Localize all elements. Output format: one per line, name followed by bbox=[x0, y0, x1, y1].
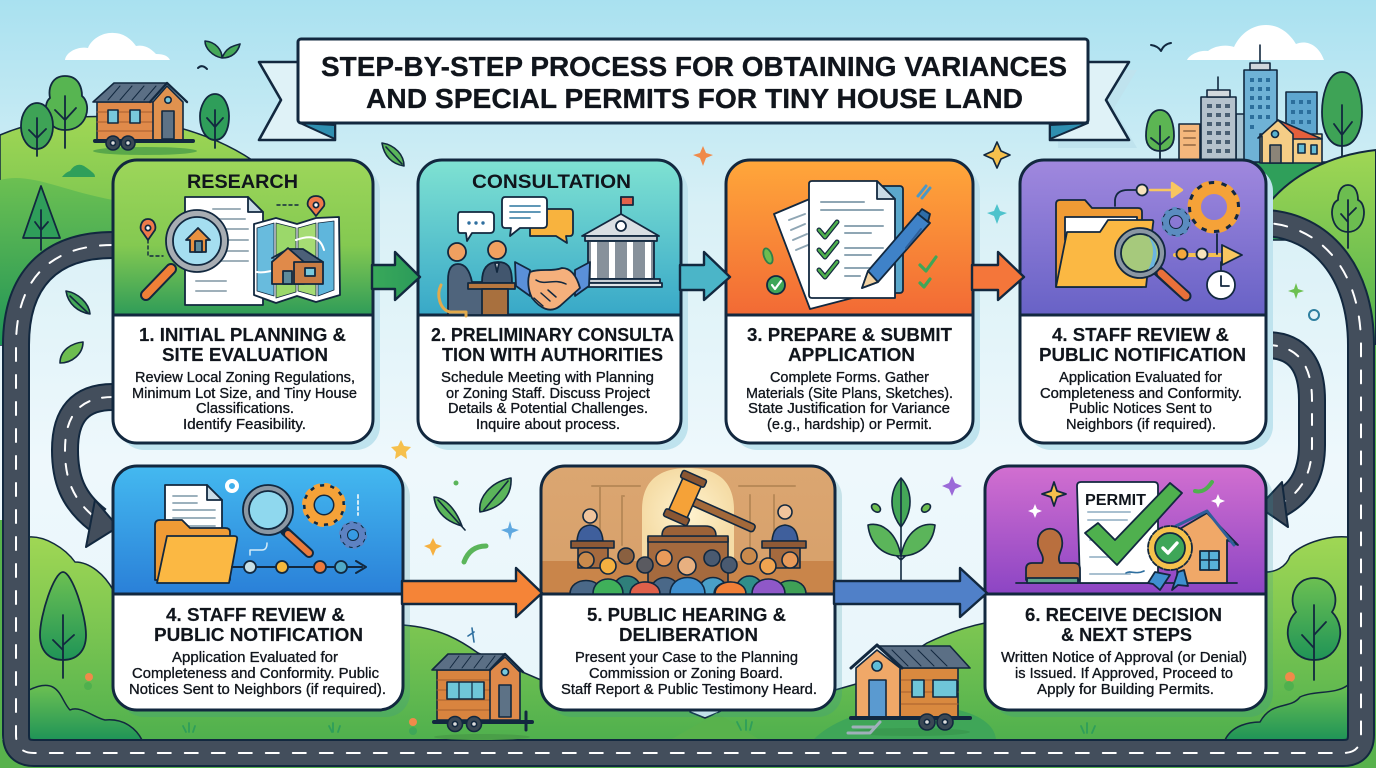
title banner: STEP-BY-STEP PROCESS FOR OBTAINING VARIANCES bbox=[321, 51, 1067, 82]
arrow: application to staff review bbox=[972, 252, 1024, 300]
icon: research document, map and magnifier bbox=[141, 196, 340, 305]
icon: permit, stamp, seal and house bbox=[1016, 482, 1238, 590]
flowers bbox=[84, 672, 1295, 735]
icon: permit, stamp, seal and house: PERMIT bbox=[1085, 492, 1147, 509]
panel: step 4 staff review: 4. STAFF REVIEW & bbox=[1052, 324, 1229, 345]
panel: step 4 staff review: Neighbors (if required). bbox=[1066, 417, 1216, 433]
panel: step 5 public hearing: 5. PUBLIC HEARING & bbox=[587, 604, 786, 625]
road arrow left bbox=[65, 397, 118, 547]
panel: step 4 staff review: Public Notices Sent to bbox=[1069, 401, 1212, 417]
panel: step 4 repeated staff review: PUBLIC NOTIFICATION bbox=[154, 624, 363, 645]
tree near city right bbox=[1322, 72, 1362, 156]
panel: step 6 receive decision: Written Notice of Approval (or Denial) bbox=[1001, 650, 1247, 666]
city skyline bbox=[1179, 45, 1322, 163]
grass tufts bbox=[183, 720, 1095, 733]
panel: step 1 research: Review Local Zoning Regulations, bbox=[135, 370, 355, 386]
panel: step 6 receive decision: 6. RECEIVE DECISION bbox=[1025, 604, 1222, 625]
panel: step 4 staff review: PUBLIC NOTIFICATION bbox=[1039, 344, 1246, 365]
panel: step 4 repeated staff review: Completeness and Conformity. Public bbox=[132, 666, 379, 682]
panel: step 2 consultation: Details & Potential Challenges. bbox=[448, 401, 648, 417]
panel: step 5 public hearing: Present your Case to the Planning bbox=[575, 650, 798, 666]
tree on right hill bbox=[1332, 185, 1364, 248]
bird left bbox=[198, 66, 207, 69]
panel: step 4 staff review: Completeness and Conformity. bbox=[1040, 386, 1242, 402]
decorative leaves and sparkles bbox=[60, 41, 1319, 642]
sprout plant bbox=[868, 478, 935, 580]
arrow: hearing to decision bbox=[834, 568, 987, 617]
icon: courtroom with gavel, speakers and audience bbox=[570, 468, 806, 594]
icon: folder, magnifier, gears and clock bbox=[1056, 183, 1242, 299]
panel: step 1 research: Minimum Lot Size, and Tiny House bbox=[132, 386, 357, 402]
panel: step 5 public hearing bbox=[541, 466, 842, 717]
panel: step 2 consultation: CONSULTATION bbox=[472, 171, 631, 193]
tree bottom left bbox=[40, 572, 86, 678]
panel: step 3 prepare and submit bbox=[726, 160, 980, 450]
road arrow right bbox=[1259, 345, 1312, 527]
panel: step 6 receive decision: & NEXT STEPS bbox=[1061, 624, 1192, 645]
cloud right bbox=[1187, 25, 1324, 60]
panel: step 5 public hearing: Commission or Zoning Board. bbox=[589, 666, 783, 682]
icon: meeting, handshake and government building bbox=[439, 197, 662, 316]
panel: step 3 prepare and submit: 3. PREPARE & SUBMIT bbox=[747, 324, 953, 345]
panel: step 1 research: Identify Feasibility. bbox=[183, 417, 306, 433]
panel: step 4 staff review bbox=[1020, 160, 1273, 450]
left top trees bbox=[21, 76, 229, 250]
panel: step 4 repeated staff review: 4. STAFF REVIEW & bbox=[166, 604, 345, 625]
icon: document, folder, magnifier and timeline bbox=[155, 481, 366, 583]
cloud left bbox=[65, 33, 170, 60]
title banner: AND SPECIAL PERMITS FOR TINY HOUSE LAND bbox=[366, 83, 1023, 114]
title banner bbox=[259, 39, 1137, 148]
tiny house bottom right bbox=[848, 645, 970, 736]
panel: step 2 consultation: TION WITH AUTHORITIES bbox=[442, 344, 663, 365]
panel: step 1 research: SITE EVALUATION bbox=[162, 344, 328, 365]
panel: step 1 research: RESEARCH bbox=[187, 171, 298, 193]
icon: application forms and pen bbox=[762, 181, 936, 309]
panel: step 3 prepare and submit: Complete Forms. Gather bbox=[770, 370, 929, 386]
panel: step 4 repeated staff review: Notices Sent to Neighbors (if required). bbox=[129, 682, 386, 698]
panel: step 3 prepare and submit: (e.g., hardship) or Permit. bbox=[767, 417, 932, 433]
bird right bbox=[1151, 43, 1171, 51]
arrow: staff review to hearing bbox=[402, 568, 542, 617]
winding road around the page bbox=[16, 223, 1361, 753]
arrow: research to consultation bbox=[372, 252, 420, 300]
panel: step 5 public hearing: DELIBERATION bbox=[619, 624, 758, 645]
tree bottom right bbox=[1288, 578, 1340, 680]
panel: step 4 repeated staff review bbox=[113, 466, 410, 717]
panel: step 3 prepare and submit: APPLICATION bbox=[788, 344, 915, 365]
panel: step 3 prepare and submit: State Justification for Variance bbox=[748, 401, 950, 417]
bottom green meadow bbox=[0, 345, 1376, 768]
tiny house top left bbox=[93, 83, 197, 155]
left top hill bbox=[0, 116, 252, 345]
panel: step 1 research: Classifications. bbox=[196, 401, 294, 417]
panel: step 4 staff review: Application Evaluated for bbox=[1059, 370, 1222, 386]
panel: step 1 research bbox=[113, 160, 380, 450]
right top hills bbox=[1240, 150, 1376, 345]
arrow: consultation to application bbox=[680, 252, 730, 300]
panel: step 2 consultation: or Zoning Staff. Discuss Project bbox=[446, 386, 650, 402]
panel: step 4 repeated staff review: Application Evaluated for bbox=[172, 650, 338, 666]
tree near city left bbox=[1146, 110, 1174, 160]
panel: step 6 receive decision bbox=[985, 466, 1273, 717]
panel: step 6 receive decision: Apply for Building Permits. bbox=[1037, 682, 1214, 698]
panel: step 2 consultation: 2. PRELIMINARY CONSULTA bbox=[431, 324, 674, 345]
panel: step 2 consultation: Schedule Meeting with Planning bbox=[441, 370, 654, 386]
panel: step 1 research: 1. INITIAL PLANNING & bbox=[139, 324, 346, 345]
panel: step 3 prepare and submit: Materials (Site Plans, Sketches). bbox=[746, 386, 953, 402]
tiny house bottom left bbox=[432, 654, 532, 740]
panel: step 2 consultation bbox=[418, 160, 688, 450]
panel: step 5 public hearing: Staff Report & Public Testimony Heard. bbox=[561, 682, 817, 698]
panel: step 2 consultation: Inquire about process. bbox=[476, 417, 620, 433]
panel: step 6 receive decision: is Issued. If Approved, Proceed to bbox=[1015, 666, 1233, 682]
